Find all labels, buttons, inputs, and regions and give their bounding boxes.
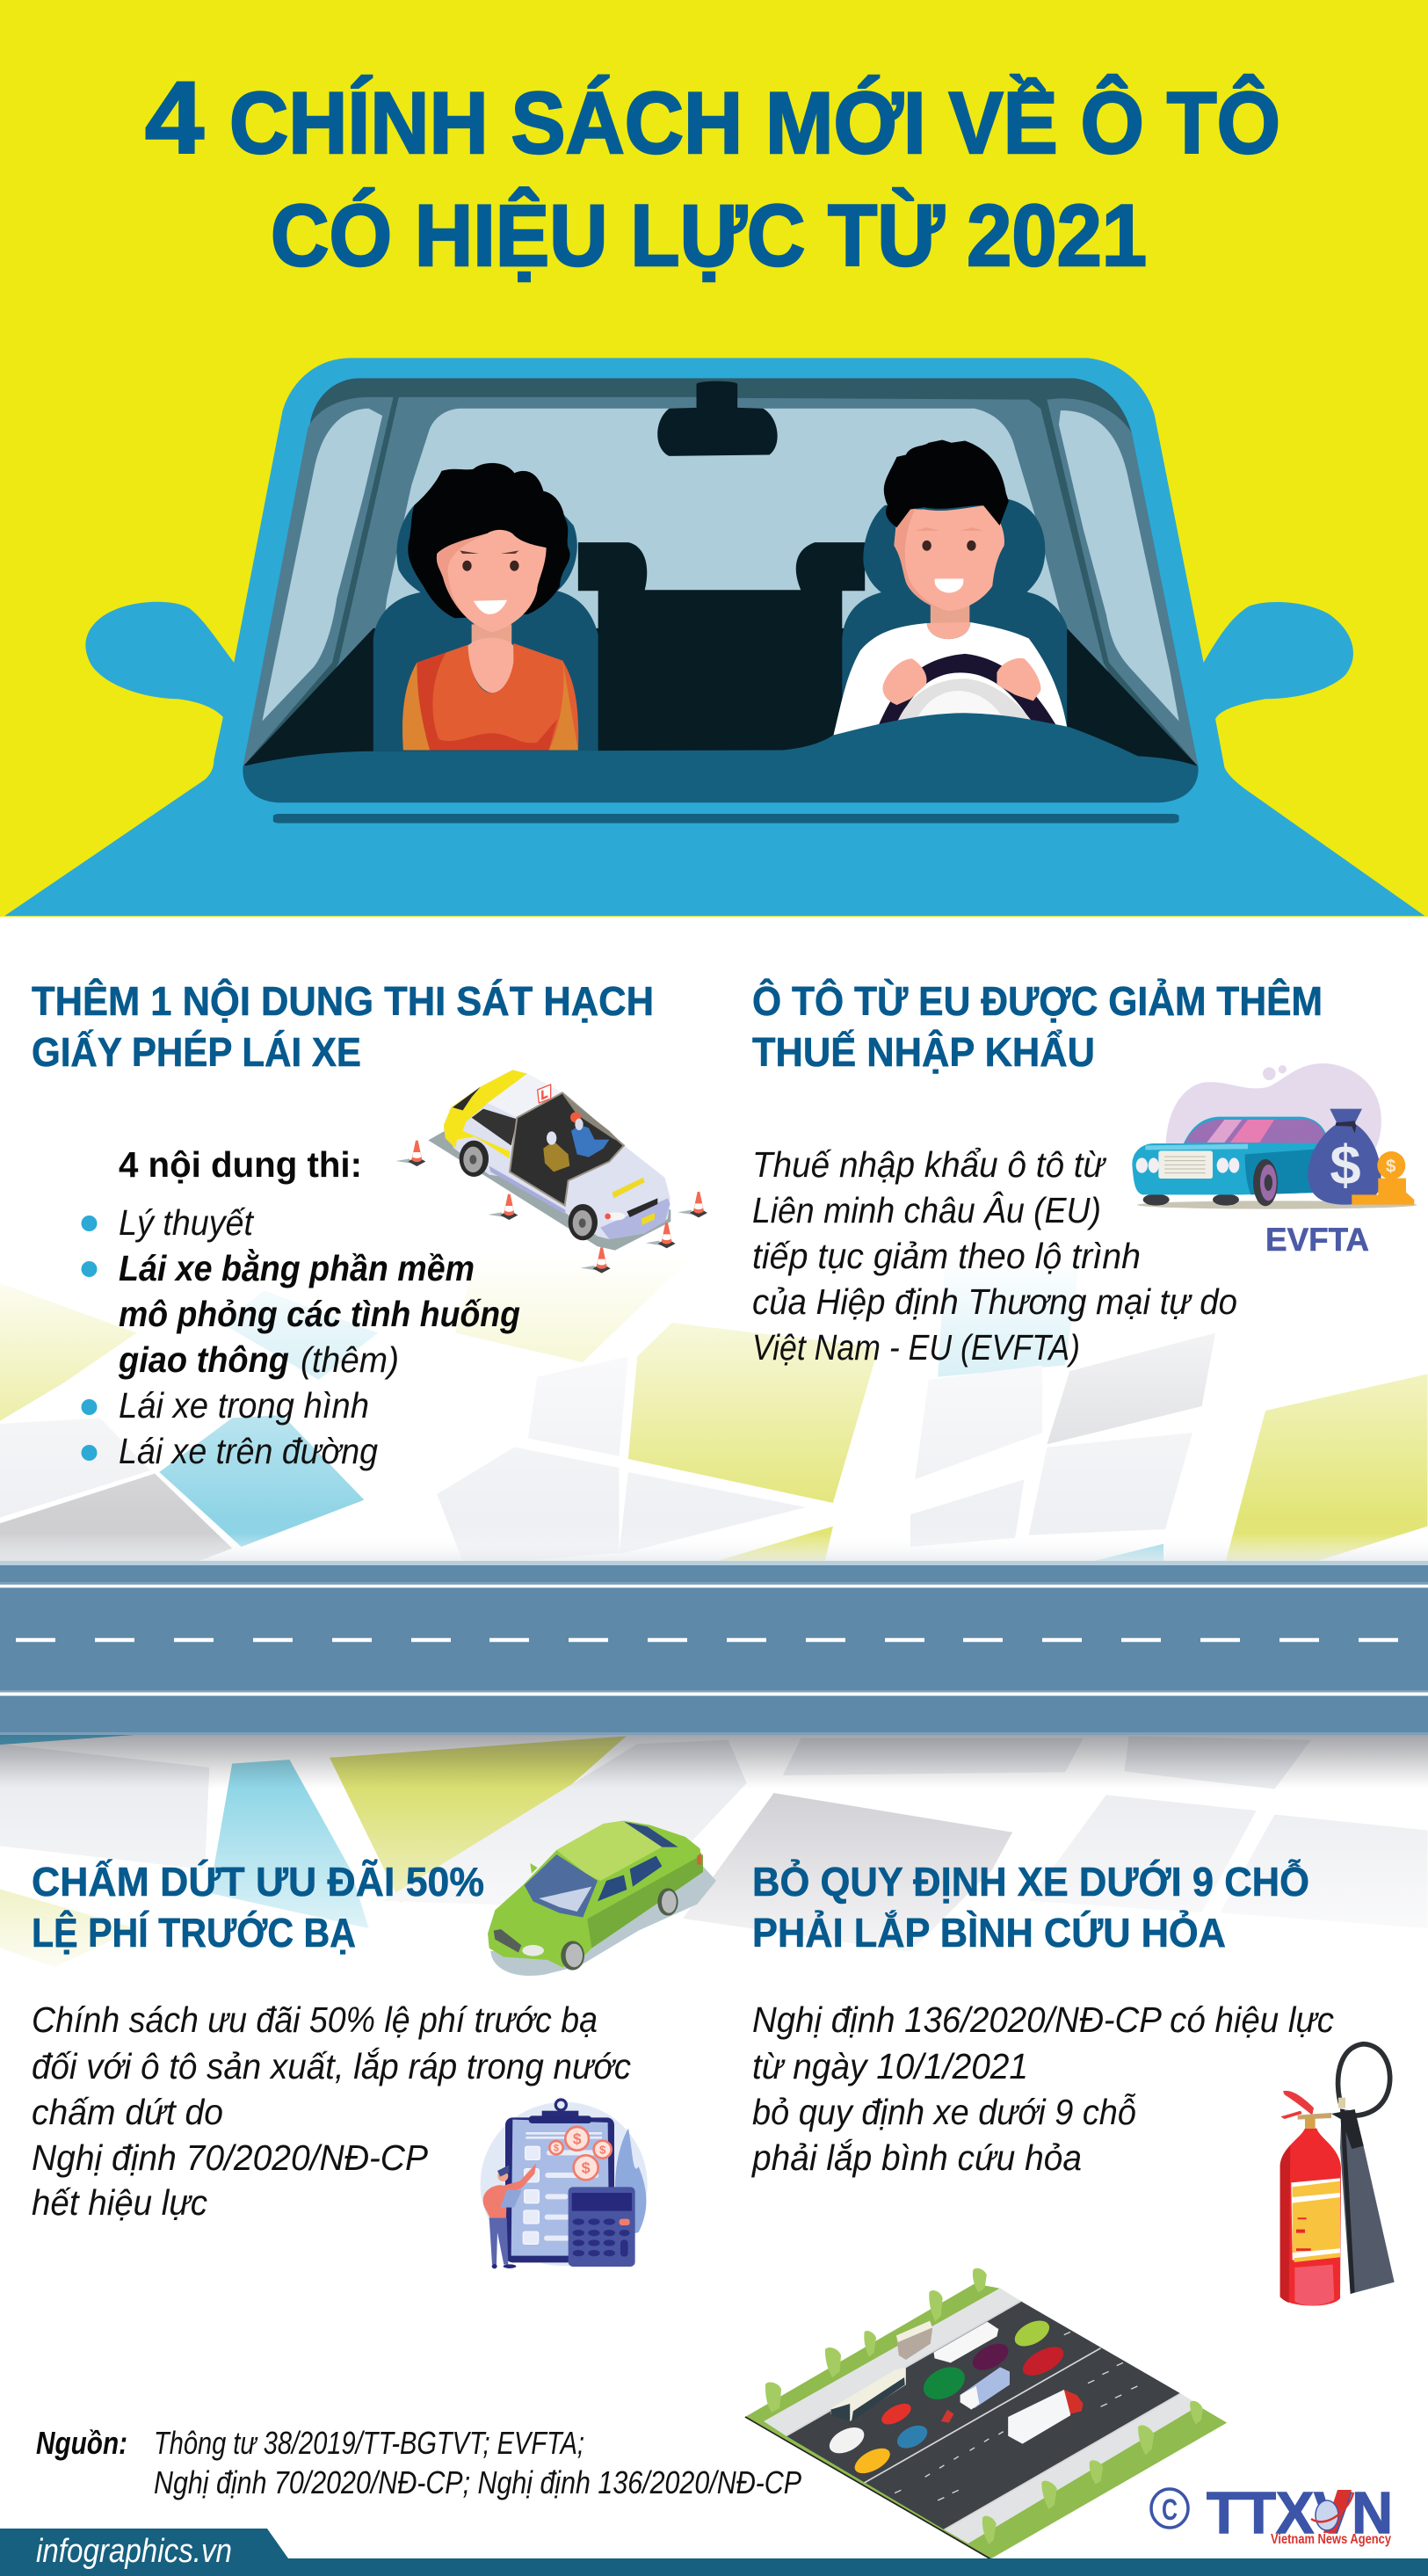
text: registration fee details [32,1999,631,2223]
text: EU import tax details [752,1144,1237,1368]
source: Thông tư 38/2019/TT-BGTVT; EVFTA; [154,2425,584,2461]
map fade upper [0,940,1428,1257]
text: EU import tax details: Thuế nhập khẩu ô tô từ [752,1144,1107,1185]
white lower background [0,917,1428,2576]
vehicles [830,2367,906,2421]
list: four test contents: Lý thuyết [119,1202,254,1243]
text: registration fee details: chấm dứt do [32,2092,223,2132]
map fade lower [0,1749,1428,2013]
text: registration fee details: Nghị định 70/2020/NĐ-CP [32,2137,429,2178]
TTXVN logo: C [1162,2493,1178,2527]
side window right [1059,410,1179,721]
icon: blue car and money bag: $ [1386,1156,1396,1176]
list: four test contents: Lái xe trong hình [119,1385,369,1426]
icon: green car [488,1821,716,1976]
list: four test contents: (thêm) [301,1339,399,1380]
list: four test contents [81,1144,520,1471]
illustration: front view of car with two people [4,358,1424,916]
icon: clipboard and calculator: $ [582,2159,591,2177]
heading: fire extinguisher rule: BỎ QUY ĐỊNH XE DƯỚI 9 CHỖ [752,1859,1309,1905]
footer site name: infographics.vn [36,2533,232,2570]
label: EVFTA: EVFTA [1265,1222,1369,1258]
map background, upper [0,1230,1427,1566]
interior dark [244,590,1197,766]
heading: fire extinguisher rule [752,1859,1309,1956]
yellow header background [0,0,1428,917]
map fade gradient [0,1257,1428,1520]
icon: isometric highway with traffic [745,2268,1227,2559]
trees [765,2268,1203,2544]
title: CHÍNH SÁCH MỚI VỀ Ô TÔ [229,74,1280,171]
main windshield glass [382,409,1061,635]
icon: clipboard and calculator [481,2100,648,2268]
title [145,61,1280,284]
source: Nghị định 70/2020/NĐ-CP; Nghị định 136/2020/NĐ-CP [154,2464,801,2500]
list: four test contents: mô phỏng các tình huống [119,1294,520,1334]
heading: new driving test content: THÊM 1 NỘI DUNG THI SÁT HẠCH [32,978,654,1024]
source [36,2425,801,2500]
rear seats [578,542,865,591]
icon: blue car and money bag [1132,1063,1417,1209]
heading: end of registration fee discount: LỆ PHÍ TRƯỚC BẠ [32,1910,356,1956]
hood stripe [273,814,1179,824]
text: EU import tax details: Liên minh châu Âu (EU) [752,1190,1101,1230]
text: fire extinguisher details: Nghị định 136/2020/NĐ-CP có hiệu lực [752,1999,1334,2040]
icon: fire extinguisher [1280,2044,1395,2306]
icon: clipboard and calculator: $ [573,2130,582,2147]
heading: end of registration fee discount [32,1859,484,1956]
icon: driving test car with cones [395,1070,707,1273]
TTXVN logo: Vietnam News Agency [1271,2532,1391,2547]
man driver [833,440,1067,737]
map background, lower [0,1734,1427,1968]
TTXVN logo: TTXVN [1207,2480,1393,2546]
heading: EU import tax [752,978,1323,1075]
text: EU import tax details: tiếp tục giảm theo lộ trình [752,1236,1141,1276]
heading: end of registration fee discount: CHẤM DỨT ƯU ĐÃI 50% [32,1859,484,1905]
text: fire extinguisher details: từ ngày 10/1/2021 [752,2046,1028,2086]
icon: blue car and money bag: $ [1330,1135,1361,1196]
windshield frame [243,378,1198,766]
text: registration fee details: Chính sách ưu đãi 50% lệ phí trước bạ [32,1999,598,2040]
heading: new driving test content [32,978,654,1075]
list: four test contents: Lái xe trên đường [119,1431,378,1471]
woman passenger [402,463,578,751]
inner frame [243,397,1198,766]
list: four test contents: 4 nội dung thi: [119,1144,362,1185]
text: fire extinguisher details: bỏ quy định xe dưới 9 chỗ [752,2092,1136,2132]
dashboard [243,713,1199,802]
title: CÓ HIỆU LỰC TỪ 2021 [271,186,1147,284]
side window left [262,409,382,721]
map fade near road [0,1534,1428,1564]
source: Nguồn: [36,2425,127,2461]
heading: fire extinguisher rule: PHẢI LẮP BÌNH CỨU HỎA [752,1910,1226,1956]
car body with side mirrors [4,358,1424,916]
list: four test contents: Lái xe bằng phần mềm [119,1248,475,1288]
list: four test contents: giao thông [118,1339,289,1380]
map shadow under road [0,1734,1428,1789]
heading: new driving test content: GIẤY PHÉP LÁI XE [32,1029,361,1075]
rearview mirror [657,381,778,456]
highway base [745,2283,1227,2559]
text: fire extinguisher details: phải lắp bình cứu hỏa [750,2137,1082,2178]
bus stop [896,2321,932,2360]
front seats [373,505,598,751]
road band [0,1561,1428,1735]
icon: clipboard and calculator: $ [554,2144,559,2154]
heading: EU import tax: Ô TÔ TỪ EU ĐƯỢC GIẢM THÊM [752,978,1323,1024]
text: EU import tax details: của Hiệp định Thương mại tự do [752,1281,1237,1322]
text: EU import tax details: Việt Nam - EU (EVFTA) [752,1327,1080,1368]
heading: EU import tax: THUẾ NHẬP KHẨU [752,1029,1095,1075]
text: fire extinguisher details [750,1999,1334,2178]
icon: clipboard and calculator: $ [599,2144,606,2157]
title: 4 [145,61,204,175]
footer bar [0,2529,1428,2576]
text: registration fee details: đối với ô tô sản xuất, lắp ráp trong nước [32,2046,631,2086]
text: registration fee details: hết hiệu lực [32,2182,207,2223]
